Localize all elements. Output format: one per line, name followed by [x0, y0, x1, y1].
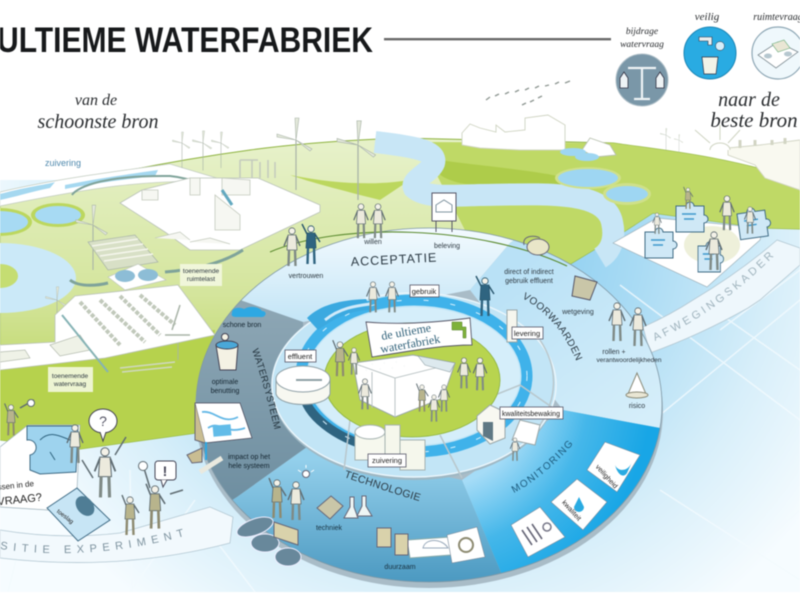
white dunes and coastal strip, left [0, 164, 232, 206]
main disc shadow [194, 289, 664, 588]
sun and small turbines [660, 125, 740, 152]
watersysteem: cloud [232, 307, 266, 317]
label: toenemende watervraag: toenemende [52, 373, 88, 380]
card: kwaliteit [551, 479, 607, 530]
label: beleving: beleving [434, 243, 460, 250]
label: willen: willen [363, 239, 382, 246]
tag: zuivering: zuivering [372, 456, 402, 465]
icon: tap and glass [684, 27, 736, 79]
ponds and lake, left [0, 203, 85, 313]
heading: monitoring: MONITORING [510, 440, 572, 493]
tag: levering [512, 327, 543, 339]
label: toenemende ruimtelast [180, 264, 222, 286]
text: van de schoonste bron: van de [75, 92, 117, 109]
icon: balance scale [616, 54, 668, 106]
tag: gebruik: gebruik [412, 287, 437, 296]
voorwaarden: scale, book, people, cone [524, 236, 648, 398]
levering column [507, 310, 517, 342]
banner: de ultieme waterfabriek: de ultieme [380, 320, 432, 343]
label: risico: risico [629, 403, 645, 410]
heading: voorwaarden: VOORWAARDEN [524, 292, 583, 361]
inner water area [308, 307, 520, 445]
label: optimale benutting [211, 379, 240, 395]
title rule [384, 38, 611, 40]
sector: acceptatie [241, 228, 514, 322]
text: naar de beste bron [710, 89, 798, 132]
banner: de ultieme waterfabriek: waterfabriek [379, 332, 441, 356]
people around factory [333, 340, 487, 422]
land edge over disc top [270, 232, 567, 266]
factory block: lower [0, 285, 215, 372]
heading: title: ULTIEME WATERFABRIEK [0, 21, 373, 60]
puzzle pieces and people, left: toeslag [55, 509, 74, 526]
green island [324, 323, 500, 437]
speech bubble: exclamation mark: ! [163, 463, 167, 479]
wind turbines [46, 118, 376, 360]
banner: afwegingskader [643, 240, 800, 352]
label: rollen en verantwoordelijkheden [596, 349, 662, 364]
puzzle pieces and people, left [5, 400, 183, 541]
tag: effluent: effluent [288, 352, 313, 361]
sector: voorwaarden [470, 240, 662, 428]
heading: watersysteem: WATERSYSTEEM [252, 348, 282, 430]
text: van de schoonste bron [38, 92, 158, 133]
card: veiligheid: veiligheid [594, 464, 619, 490]
card: kwaliteit: kwaliteit [560, 499, 582, 523]
text: naar de beste bron: naar de [718, 89, 780, 111]
text: naar de beste bron: beste bron [710, 108, 798, 132]
label: bijdrage watervraag: watervraag [620, 40, 664, 50]
icon: spatial demand [752, 27, 800, 79]
label: impact op het hele systeem: impact op het [228, 454, 270, 461]
sea with grid lines [0, 180, 800, 600]
tag: gebruik [410, 285, 439, 297]
label: veilig: veilig [695, 11, 720, 23]
sector: monitoring [462, 410, 660, 574]
tag: kwaliteitsbewaking [500, 407, 563, 419]
main disc [196, 228, 662, 582]
inner disc [272, 293, 556, 480]
tag: effluent [285, 350, 316, 362]
skyline city right [462, 115, 800, 190]
speech bubble: exclamation mark [155, 461, 176, 487]
label: rollen en verantwoordelijkheden: rollen + [602, 349, 626, 356]
banner: afwegingskader: AFWEGINGSKADER [654, 252, 774, 342]
speech bubble: question mark: ? [99, 413, 107, 429]
quality-control building [477, 405, 540, 461]
label: schone bron: schone bron [223, 322, 261, 329]
watersysteem: map [187, 403, 252, 472]
land: green polder [0, 138, 800, 449]
right puzzle sheet [613, 218, 763, 287]
watersysteem: bucket with person [216, 334, 238, 370]
technologie: people, basins, flasks, drums [234, 465, 451, 566]
label: bijdrage watervraag [620, 27, 664, 50]
banner: experiment: SITIE EXPERIMENT [0, 528, 183, 554]
label: toenemende ruimtelast: ruimtelast [187, 276, 215, 283]
sector: watersysteem [196, 300, 306, 500]
text: van de schoonste bron: schoonste bron [38, 111, 158, 133]
sector: technologie [232, 448, 502, 582]
puzzle pieces and people, right [645, 187, 772, 272]
label: toenemende ruimtelast: toenemende [183, 268, 219, 275]
tank: effluent [276, 366, 330, 404]
card: veiligheid [587, 442, 640, 492]
label: impact op het hele systeem [228, 454, 270, 470]
speech bubble: question mark [89, 409, 117, 441]
label: impact op het hele systeem: hele systeem [228, 463, 270, 470]
tanks: zuivering [355, 425, 425, 470]
label: direct of indirect gebruik effluent [504, 269, 554, 285]
river right [375, 142, 613, 258]
label: duurzaam: duurzaam [384, 564, 416, 571]
birds [486, 81, 570, 105]
label: direct of indirect gebruik effluent: gebruik effluent [505, 278, 553, 285]
label: direct of indirect gebruik effluent: direct of indirect [504, 269, 554, 276]
water ring [301, 299, 527, 452]
tag: kwaliteitsbewaking: kwaliteitsbewaking [502, 411, 560, 418]
tag: levering: levering [514, 329, 540, 338]
left puzzle sheet [0, 425, 80, 510]
acceptatie: people and board [284, 193, 494, 316]
factory building [353, 355, 455, 417]
solar field and basins [70, 235, 243, 290]
factory block: upper [120, 160, 320, 250]
banner: experiment [0, 506, 234, 564]
banner: de ultieme waterfabriek [366, 318, 472, 357]
grey pipes [344, 340, 556, 478]
label: rollen en verantwoordelijkheden: verantwoordelijkheden [596, 357, 662, 364]
label: wetgeving: wetgeving [561, 309, 594, 316]
card: kwantiteit [511, 507, 565, 557]
card: circular icon [447, 527, 485, 563]
ponds right [555, 167, 651, 205]
label: vertrouwen: vertrouwen [289, 273, 323, 280]
label: toenemende watervraag: watervraag [53, 381, 86, 388]
heading: technologie: TECHNOLOGIE [346, 470, 422, 502]
label: optimale benutting: benutting [211, 388, 240, 395]
tag: zuivering [368, 454, 406, 467]
disc outline [196, 228, 662, 582]
label: techniek: techniek [316, 525, 343, 532]
label: bijdrage watervraag: bijdrage [626, 27, 658, 37]
label: optimale benutting: optimale [212, 379, 238, 386]
label: toenemende watervraag [48, 367, 93, 392]
label: zuivering: zuivering [45, 158, 81, 168]
heading: acceptatie: ACCEPTATIE [350, 250, 438, 269]
